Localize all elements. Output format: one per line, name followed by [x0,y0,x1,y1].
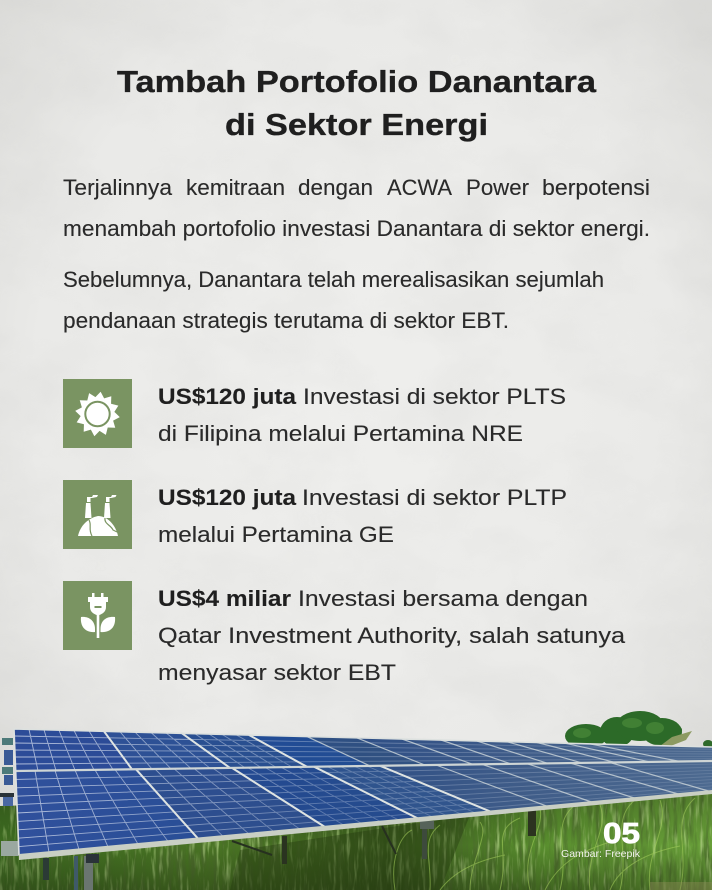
icon: plug plant [63,581,132,650]
icon: sun [63,379,132,448]
title [117,64,597,142]
second paragraph [63,267,604,333]
intro paragraph: dengan [298,175,373,200]
item 3 text: Qatar Investment Authority, salah satunya [158,623,626,648]
image credit: Gambar: Freepik [561,848,641,860]
top row panel tints [14,729,491,839]
intro paragraph: Terjalinnya [63,175,173,200]
intro paragraph: Power [466,175,529,200]
intro paragraph: kemitraan [186,175,285,200]
item 1 text [158,384,566,446]
photo: grass field [0,785,712,890]
second paragraph: Sebelumnya, Danantara telah merealisasikan sejumlah [63,267,604,292]
item 2 text: US$120 juta [158,485,297,510]
item 2 text [158,485,567,547]
item 3 text: US$4 miliar [158,586,291,611]
title: di Sektor Energi [225,107,488,142]
item 1 text: Investasi di sektor PLTS [303,384,566,409]
item 2 text: melalui Pertamina GE [158,522,394,547]
panel frame and dividers [104,731,491,839]
title: Tambah Portofolio Danantara [117,64,597,99]
item 1 text: di Filipina melalui Pertamina NRE [158,421,523,446]
photo: panel rack and legs [0,738,536,890]
item 1 text: US$120 juta [158,384,297,409]
item 3 text: menyasar sektor EBT [158,660,396,685]
page number: 05 [603,818,640,850]
intro paragraph [63,175,650,241]
item 2 text: Investasi di sektor PLTP [302,485,567,510]
cell grid lines [14,729,712,852]
second paragraph: pendanaan strategis terutama di sektor EBT. [63,308,509,333]
intro paragraph: berpotensi [542,175,650,200]
intro paragraph: ACWA [387,175,452,200]
icon: geothermal plant [63,480,132,549]
photo: solar panels [14,729,712,860]
intro paragraph: menambah portofolio investasi Danantara di sektor energi. [63,216,650,241]
photo: tree behind panels [565,711,712,748]
item 3 text: Investasi bersama dengan [298,586,588,611]
item 3 text [158,586,626,685]
